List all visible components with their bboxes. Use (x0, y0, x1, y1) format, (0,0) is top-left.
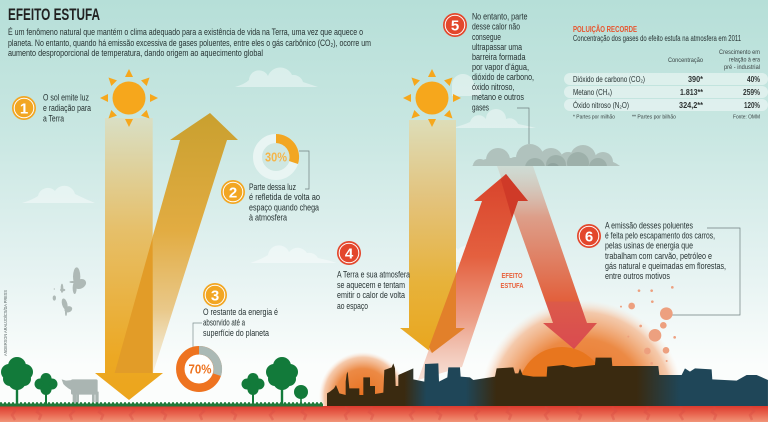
row: oxido nitroso (573, 101, 760, 110)
heat glow over the city (319, 300, 684, 406)
icon: sun left (100, 69, 158, 127)
text: step 5: gases (472, 102, 489, 112)
donut chart: 30% (258, 134, 299, 176)
text: step 6: é feita pelo escapamento dos carros, (605, 230, 715, 240)
row: dioxido de carbono: Dióxido de carbono (CO₂) (573, 75, 645, 84)
badge 1: 1 (20, 100, 28, 118)
badge 4: 4 (345, 246, 354, 262)
label: efeito estufa: EFEITO (502, 271, 523, 280)
text: step 5: desse calor não (472, 22, 520, 32)
text: step 5: barreira formada (472, 52, 526, 62)
row: metano: 1.813** (680, 88, 704, 97)
badge 5: 5 (451, 18, 459, 34)
pollution bubbles (620, 286, 676, 365)
table footnotes (573, 114, 760, 120)
title: EFEITO ESTUFA (8, 6, 100, 24)
arrow: red heat going up (418, 174, 528, 380)
text: step 6: gás natural e queimadas em florestas, (605, 261, 726, 271)
table footnotes: * Partes por milhão (573, 114, 615, 120)
donut chart: 70%: 70% (188, 362, 212, 376)
clouds (22, 67, 536, 263)
greenhouse gas cloud (472, 144, 620, 166)
pointer line step 5 (517, 108, 529, 144)
label: efeito estufa: ESTUFA (500, 281, 524, 290)
row: metano (573, 88, 760, 97)
column headers (668, 49, 760, 71)
arrow overlap right (429, 274, 465, 353)
column headers: Crescimento em (719, 49, 760, 56)
trees (1, 357, 308, 405)
text: step 2: à atmosfera (249, 212, 287, 222)
text: step 5 (472, 12, 534, 112)
text: step 4: emitir o calor de volta (337, 290, 405, 300)
badge 6: 6 (585, 228, 593, 246)
text: step 3: superfície do planeta (203, 328, 269, 338)
badge 1 (12, 96, 36, 120)
intro text: aumento desproporcional de temperatura, dando origem ao aquecimento global (8, 48, 263, 58)
text: step 5: consegue (472, 32, 501, 42)
credit: ANDERSON ARAUJO/CS/DA PRESS (3, 290, 8, 356)
column headers: relação à era (729, 56, 760, 64)
row: dioxido de carbono (573, 75, 760, 84)
text: step 6: trabalham com carvão, petróleo e (605, 251, 712, 261)
text: step 3: absorvido até a (203, 318, 245, 328)
text: step 4 (337, 270, 410, 311)
text: step 5: metano e outros (472, 92, 524, 102)
column headers: pré - industrial (724, 64, 760, 71)
pointer line step 2 (299, 151, 309, 189)
icon: sun right (403, 69, 461, 127)
text: step 5: dióxido de carbono, (472, 72, 534, 82)
intro text: É um fenômeno natural que mantém o clima adequado para a existência de vida na Terra, uma vez que aquece o (8, 27, 363, 37)
text: step 6 (605, 220, 726, 281)
text: step 3: O restante da energia é (203, 307, 278, 317)
badge 5 (443, 13, 467, 37)
badge 2: 2 (229, 184, 237, 202)
text: step 2: Parte dessa luz (249, 182, 296, 192)
arrow: reflected light going up (114, 113, 238, 373)
table footnotes: ** Partes por bilhão (632, 114, 676, 120)
row: oxido nitroso: 324,2** (679, 101, 704, 110)
ground with heat cracks (0, 406, 768, 422)
text: step 4: ao espaço (337, 301, 368, 311)
text: step 2 (249, 182, 320, 222)
table heading: POLUIÇÃO RECORDE (573, 25, 638, 34)
arrow: sunlight going down (95, 118, 163, 400)
text: step 6: pelas usinas de energia que (605, 240, 693, 250)
text: step 3 (203, 307, 278, 338)
row: oxido nitroso: 120% (744, 101, 760, 110)
grass (0, 403, 323, 406)
row: dioxido de carbono: 390* (688, 75, 704, 84)
table footnotes: Fonte: OMM (733, 114, 760, 120)
row: metano: 259% (743, 88, 760, 97)
table row bands (564, 73, 768, 111)
intro text: planeta. No entanto, quando há emissão excessiva de gases poluentes, entre eles o gás carbônico (CO₂), ocorre um (8, 38, 371, 48)
icon: birds (53, 267, 88, 316)
intro text (8, 27, 371, 58)
text: step 4: A Terra e sua atmosfera (337, 270, 410, 280)
arrow crossing darker overlap (501, 174, 528, 218)
label: efeito estufa (500, 271, 524, 290)
donut chart: 70% (180, 346, 222, 388)
arrow overlap (115, 237, 153, 373)
text: step 2: espaço quando chega (249, 202, 319, 212)
arrow: red heat trapped going down (497, 166, 597, 349)
column headers: Concentração (668, 57, 703, 64)
text: step 2: é refletida de volta ao (249, 192, 320, 202)
badge 3: 3 (211, 288, 219, 304)
badge 6 (577, 224, 601, 248)
text: step 6: entre outros motivos (605, 271, 670, 281)
badge 3 (203, 283, 227, 307)
city skyline (327, 358, 768, 406)
panel: poluicao recorde table (564, 25, 768, 120)
text: step 4: se aquecem e tentam (337, 280, 405, 290)
badge 4 (337, 241, 361, 265)
text: step 5: por vapor d’água, (472, 62, 529, 72)
text: step 5: ultrapassar uma (472, 42, 522, 52)
text: step 6: A emissão desses poluentes (605, 220, 693, 230)
donut chart: 30%: 30% (265, 150, 287, 164)
row: dioxido de carbono: 40% (747, 75, 760, 84)
text: step 5: óxido nitroso, (472, 82, 514, 92)
pointer line step 3 (193, 323, 202, 348)
row: metano: Metano (CH₄) (573, 88, 612, 97)
text: step 1: e radiação para (43, 103, 91, 113)
text: step 1 (43, 92, 91, 124)
pointer line step 6 (672, 228, 740, 315)
text: step 5: No entanto, parte (472, 12, 528, 22)
text: step 1: O sol emite luz (43, 92, 89, 102)
row: oxido nitroso: Óxido nitroso (N₂O) (573, 101, 629, 110)
arrow: yellow sunlight going down (right scene) (400, 120, 465, 353)
text: step 1: a Terra (43, 114, 64, 124)
icon: cow (62, 379, 99, 403)
badge 2 (221, 180, 245, 204)
